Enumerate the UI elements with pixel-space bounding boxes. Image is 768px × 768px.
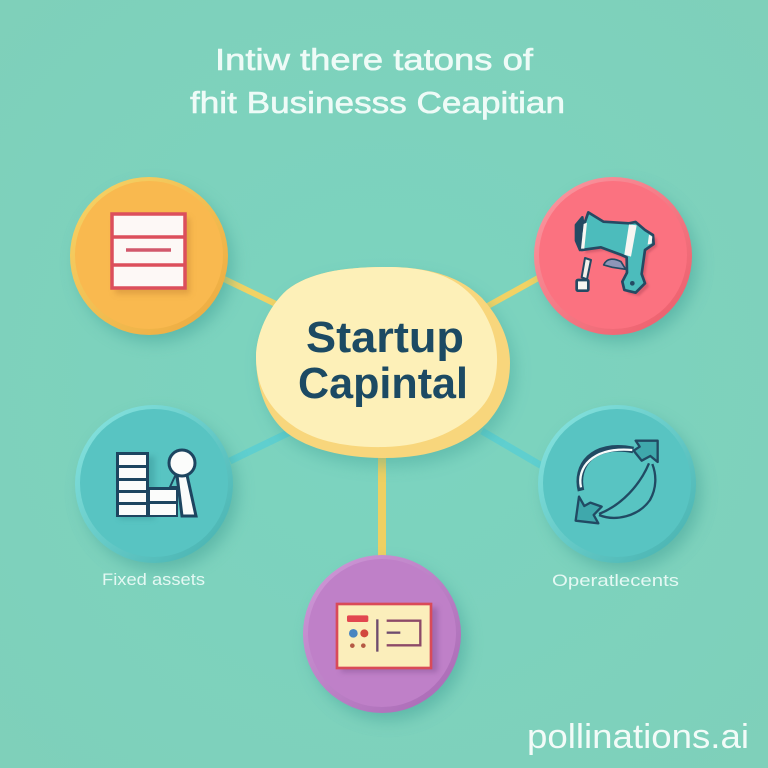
watermark: pollinations.ai [527, 718, 749, 756]
node: right teal circle with cycle icon [538, 405, 701, 570]
center node: Startup Capital [256, 267, 515, 466]
node: left teal circle with fixed assets icon [75, 405, 238, 570]
node: orange circle with document icon [70, 177, 233, 342]
connector: right teal to center [482, 431, 542, 466]
icon: cycle arrows [576, 441, 658, 523]
node: purple circle with card icon [303, 555, 466, 720]
title [190, 42, 565, 120]
connector: orange to center [222, 278, 282, 307]
label: operating costs: Operatlecents [552, 571, 679, 590]
connector: red to center [486, 277, 540, 307]
connector: purple to center [378, 455, 386, 558]
connector: left teal to center [230, 432, 290, 461]
icon: megaphone [576, 212, 657, 296]
title: fhit Businesss Ceapitian [190, 85, 565, 120]
icon: card [337, 604, 438, 672]
icon: document rows [112, 214, 190, 294]
title: Intiw there tatons of [215, 42, 533, 77]
center node: Startup Capital: Startup [306, 313, 464, 362]
node: red circle with megaphone icon [534, 177, 697, 342]
label: fixed assets: Fixed assets [102, 570, 205, 589]
center node: Startup Capital: Capintal [298, 359, 468, 408]
icon: building blocks and keyhole [116, 450, 196, 519]
